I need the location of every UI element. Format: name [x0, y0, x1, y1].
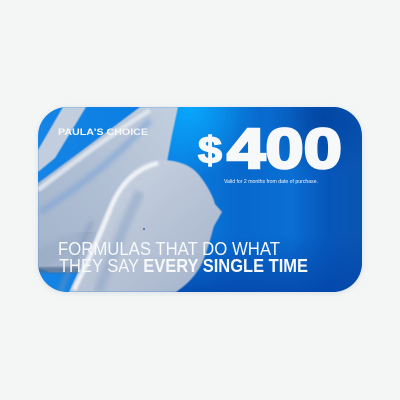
- gift card panel: [38, 107, 362, 292]
- brand logo text: PAULA'S CHOICE: [58, 126, 148, 137]
- cream swatch: left streak: [38, 107, 86, 172]
- card shadow: [38, 108, 362, 293]
- headline: [58, 239, 308, 276]
- gift card infographic: [36, 106, 364, 294]
- headline line 2: THEY SAY EVERY SINGLE TIME: [59, 256, 308, 276]
- cream swatch: large streak and body: [38, 107, 178, 273]
- validity note: Valid for 2 months from date of purchase.: [224, 179, 318, 185]
- price: dollar sign: $: [198, 130, 222, 172]
- cream swatch: front mound: [60, 160, 222, 292]
- headline line 1: FORMULAS THAT DO WHAT: [58, 239, 280, 259]
- blue background: [38, 107, 362, 292]
- price: amount: 400: [227, 117, 342, 181]
